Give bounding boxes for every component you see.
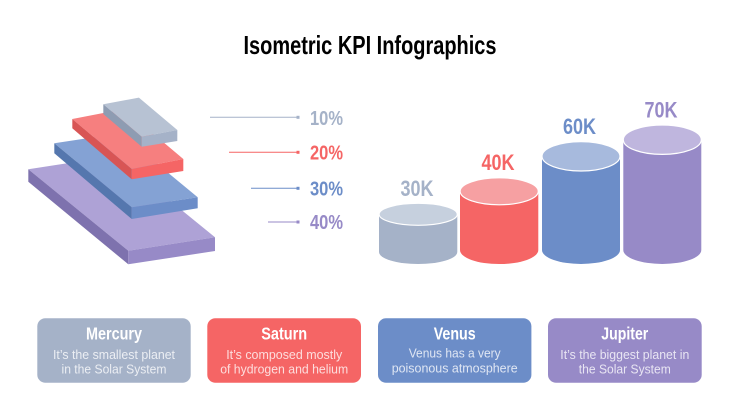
cylinder: 30K: 30K bbox=[400, 176, 434, 201]
percentage label: 10% bbox=[210, 108, 343, 130]
percentage label: 20% bbox=[229, 142, 343, 164]
cylinder: 70K: 70K bbox=[644, 98, 678, 123]
percentage label: 20%: 20% bbox=[310, 142, 343, 164]
percentage label: 30%: 30% bbox=[310, 178, 343, 200]
isometric stacked layers chart bbox=[28, 98, 215, 264]
card: Mercury: in the Solar System bbox=[62, 362, 166, 376]
layer: red 20% bbox=[72, 109, 183, 179]
card: Mercury: It’s the smallest planet bbox=[53, 348, 176, 362]
card: Mercury: Mercury bbox=[86, 323, 142, 343]
cylinder: 60K: 60K bbox=[563, 114, 596, 139]
percentage label: 30% bbox=[251, 178, 343, 200]
card: Saturn: It’s composed mostly bbox=[226, 348, 343, 362]
card: Mercury bbox=[37, 318, 191, 383]
card: Jupiter: Jupiter bbox=[601, 323, 648, 343]
card: Saturn: of hydrogen and helium bbox=[220, 362, 348, 376]
cylinder: 30K bbox=[379, 176, 457, 264]
card: Saturn: Saturn bbox=[261, 323, 307, 343]
card: Jupiter bbox=[548, 318, 702, 383]
title: Isometric KPI Infographics bbox=[244, 30, 496, 60]
percentage label: 40%: 40% bbox=[310, 212, 343, 234]
cylinder: 60K bbox=[542, 114, 620, 264]
card: Jupiter: It’s the biggest planet in bbox=[560, 348, 689, 362]
card: Saturn bbox=[207, 318, 361, 383]
card: Jupiter: the Solar System bbox=[579, 362, 671, 376]
card: Venus: Venus has a very bbox=[409, 346, 501, 360]
percentage label: 40% bbox=[268, 212, 343, 234]
card: Venus: Venus bbox=[434, 323, 476, 343]
percentage label: 10%: 10% bbox=[310, 108, 343, 130]
cylinder: 70K bbox=[623, 98, 701, 264]
layer: purple 40% bbox=[28, 156, 215, 264]
layer: blue 30% bbox=[54, 133, 198, 219]
cylinder: 40K bbox=[460, 150, 538, 264]
card: Venus bbox=[378, 318, 531, 383]
cylinder: 40K: 40K bbox=[482, 150, 515, 175]
layer: gray 10% bbox=[103, 98, 177, 147]
card: Venus: poisonous atmosphere bbox=[392, 361, 518, 375]
